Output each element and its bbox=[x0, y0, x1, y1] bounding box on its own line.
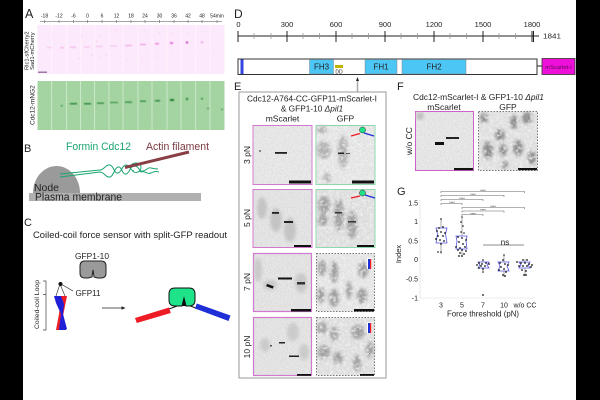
box 3 pN bbox=[435, 218, 447, 254]
y tick labels: -1 bbox=[412, 296, 418, 302]
domain bar bbox=[238, 59, 537, 76]
label Plasma membrane: Plasma membrane bbox=[35, 192, 122, 204]
coiled coil length bracket bbox=[34, 280, 46, 330]
heading G: G bbox=[397, 186, 406, 198]
right black bar bbox=[576, 0, 600, 400]
time ruler: 0 bbox=[86, 14, 89, 20]
icon: closed sensor bbox=[367, 258, 372, 269]
y tick labels: 0 bbox=[414, 257, 418, 264]
heading D: D bbox=[234, 7, 243, 21]
label Formin Cdc12: Formin Cdc12 bbox=[66, 141, 131, 153]
y tick labels bbox=[406, 200, 418, 302]
x tick labels: 7 bbox=[481, 302, 485, 310]
label Actin filament: Actin filament bbox=[146, 141, 209, 153]
row 7 pN: 7 pN bbox=[242, 273, 252, 291]
rotated row label: Rlc1 / Sad1: Sad1-mCherry bbox=[30, 32, 36, 70]
heading F: F bbox=[397, 81, 404, 93]
rotated row label: Rlc1 / Sad1: Rlc1-sfCherry2 bbox=[24, 31, 30, 70]
panel D: protein domain map bbox=[234, 7, 575, 92]
row 3 pN: 3 pN bbox=[242, 146, 252, 164]
FH1 domain bbox=[365, 60, 397, 74]
row 3 pN bbox=[242, 126, 375, 184]
icon: closed sensor bbox=[367, 322, 372, 333]
panel A: time-lapse montage bbox=[24, 7, 224, 130]
column heading mScarlet: mScarlet bbox=[427, 102, 461, 112]
time ruler: 12 bbox=[114, 14, 119, 20]
column heading GFP: GFP bbox=[337, 114, 355, 124]
time ruler: 54min bbox=[210, 14, 224, 20]
time ruler: 18 bbox=[128, 14, 134, 20]
row 5 pN bbox=[242, 190, 375, 248]
significance stars: **** bbox=[449, 201, 455, 205]
label GFP11: GFP11 bbox=[76, 288, 101, 298]
panel G: index box plot bbox=[394, 186, 536, 318]
time ruler: 48 bbox=[199, 14, 205, 20]
x tick labels: 10 bbox=[500, 302, 508, 310]
time ruler: -6 bbox=[71, 14, 76, 20]
time ruler: 42 bbox=[185, 14, 191, 20]
significance stars: **** bbox=[490, 205, 496, 209]
amino acid ruler: 300 bbox=[281, 20, 293, 29]
x tick labels: w/o CC bbox=[513, 302, 536, 310]
label GFP1-10: GFP1-10 bbox=[75, 251, 109, 261]
7 pN mScarlet image bbox=[254, 254, 312, 312]
row label w/o CC: w/o CC bbox=[404, 127, 414, 156]
formin strands bbox=[60, 163, 159, 177]
panel E: split GFP images bbox=[234, 81, 386, 378]
DD domain bbox=[335, 65, 343, 76]
significance stars: **** bbox=[480, 208, 486, 212]
row 7 pN bbox=[242, 254, 374, 312]
significance stars: **** bbox=[470, 193, 476, 197]
significance stars bbox=[449, 189, 496, 216]
7 pN GFP image bbox=[316, 254, 374, 312]
amino acid ruler: 600 bbox=[330, 20, 342, 29]
F mScarlet image bbox=[416, 112, 474, 170]
FH1 domain: FH1 bbox=[373, 62, 389, 72]
left black bar bbox=[0, 0, 23, 400]
arrow bbox=[102, 306, 126, 310]
insertion arrow bbox=[356, 77, 359, 92]
panel E title: Cdc12-A764-CC-GFP11-mScarlet-I bbox=[247, 94, 377, 104]
amino acid ruler: 1841 bbox=[543, 32, 561, 40]
row 5 pN: 5 pN bbox=[242, 209, 252, 227]
box 7 pN bbox=[476, 259, 490, 296]
amino acid ruler: 1200 bbox=[426, 20, 442, 29]
y axis title: Index bbox=[394, 245, 403, 263]
DD domain: DD bbox=[335, 70, 343, 76]
row 10 pN bbox=[242, 318, 374, 376]
5 pN GFP image bbox=[316, 190, 375, 248]
amino acid ruler: 0 bbox=[236, 20, 241, 29]
x axis title: Force threshold (pN) bbox=[447, 310, 519, 318]
row 10 pN: 10 pN bbox=[242, 336, 252, 358]
open sensor with reconstituted GFP bbox=[135, 288, 230, 323]
heading A: A bbox=[25, 7, 34, 21]
panel F: control images bbox=[397, 81, 544, 170]
time ruler: -18 bbox=[41, 14, 48, 20]
FH3 domain bbox=[310, 60, 334, 74]
column heading mScarlet: mScarlet bbox=[266, 114, 300, 124]
amino acid ruler: 1800 bbox=[524, 20, 540, 29]
amino acid ruler: 900 bbox=[379, 20, 391, 29]
ns bracket: ns bbox=[501, 238, 509, 247]
x tick labels: 5 bbox=[460, 302, 464, 310]
significance stars: **** bbox=[480, 189, 486, 193]
significance stars: **** bbox=[470, 212, 476, 216]
amino acid ruler bbox=[236, 20, 561, 42]
F GFP image bbox=[478, 112, 538, 170]
node dome bbox=[33, 166, 80, 193]
FH3 domain: FH3 bbox=[314, 62, 330, 72]
box 10 pN bbox=[498, 254, 509, 277]
pink image strip bbox=[38, 25, 224, 74]
3 pN mScarlet image bbox=[253, 126, 312, 184]
green image strip bbox=[38, 81, 224, 130]
time ruler: 24 bbox=[142, 14, 148, 20]
10 pN mScarlet image bbox=[254, 318, 312, 376]
rotated row label: Cdc12-mNG2: Cdc12-mNG2 bbox=[30, 85, 36, 125]
panel C title: Coiled-coil force sensor with split-GFP readout bbox=[33, 230, 228, 240]
actin filament bbox=[125, 152, 189, 168]
5 pN mScarlet image bbox=[253, 190, 312, 248]
heading E: E bbox=[234, 81, 241, 93]
label Node: Node bbox=[34, 182, 59, 194]
icon: open sensor bbox=[351, 127, 374, 136]
panel F title: Cdc12-mScarlet-I & GFP1-10 Δpil1 bbox=[413, 93, 544, 102]
icon: open sensor bbox=[351, 190, 375, 198]
ns bracket bbox=[483, 238, 524, 247]
box w/o CC bbox=[516, 259, 533, 276]
time ruler: 36 bbox=[171, 14, 177, 20]
time ruler: -12 bbox=[55, 14, 63, 20]
heading C: C bbox=[24, 217, 32, 229]
panel E subtitle: & GFP1-10 Δpil1 bbox=[281, 104, 343, 114]
significance stars: **** bbox=[459, 197, 465, 201]
mScarlet-I tag bbox=[537, 58, 575, 74]
y tick labels: -0.5 bbox=[406, 276, 418, 284]
plasma membrane bar bbox=[29, 193, 201, 201]
mScarlet-I tag: mScarlet-I bbox=[545, 65, 572, 71]
heading B: B bbox=[24, 143, 31, 155]
panel C: coiled-coil sensor bbox=[24, 217, 230, 330]
time ruler bbox=[40, 14, 224, 23]
x tick labels bbox=[439, 302, 536, 310]
box 5 pN bbox=[455, 216, 467, 257]
3 pN GFP image bbox=[316, 126, 375, 184]
panel E frame bbox=[239, 92, 386, 378]
time ruler: 30 bbox=[157, 14, 162, 20]
amino acid ruler: 1500 bbox=[475, 20, 491, 29]
time ruler: 6 bbox=[101, 14, 104, 20]
panel B: formin on node schematic bbox=[24, 141, 209, 204]
x tick labels: 3 bbox=[439, 302, 443, 310]
y tick labels: 1.5 bbox=[408, 200, 418, 208]
y tick labels: 0.5 bbox=[408, 238, 418, 246]
closed coiled coil with GFP11 loop bbox=[54, 282, 73, 330]
column heading GFP: GFP bbox=[499, 102, 517, 112]
axes bbox=[420, 200, 535, 298]
coiled coil length bracket: Coiled-coil Loop bbox=[34, 280, 41, 329]
10 pN GFP image bbox=[316, 318, 374, 376]
scale bar bbox=[38, 72, 47, 73]
FH2 domain bbox=[402, 60, 466, 74]
icon: GFP1-10 barrel bbox=[80, 261, 106, 278]
FH2 domain: FH2 bbox=[426, 62, 442, 72]
significance brackets bbox=[441, 192, 524, 216]
y tick labels: 1 bbox=[414, 219, 418, 226]
